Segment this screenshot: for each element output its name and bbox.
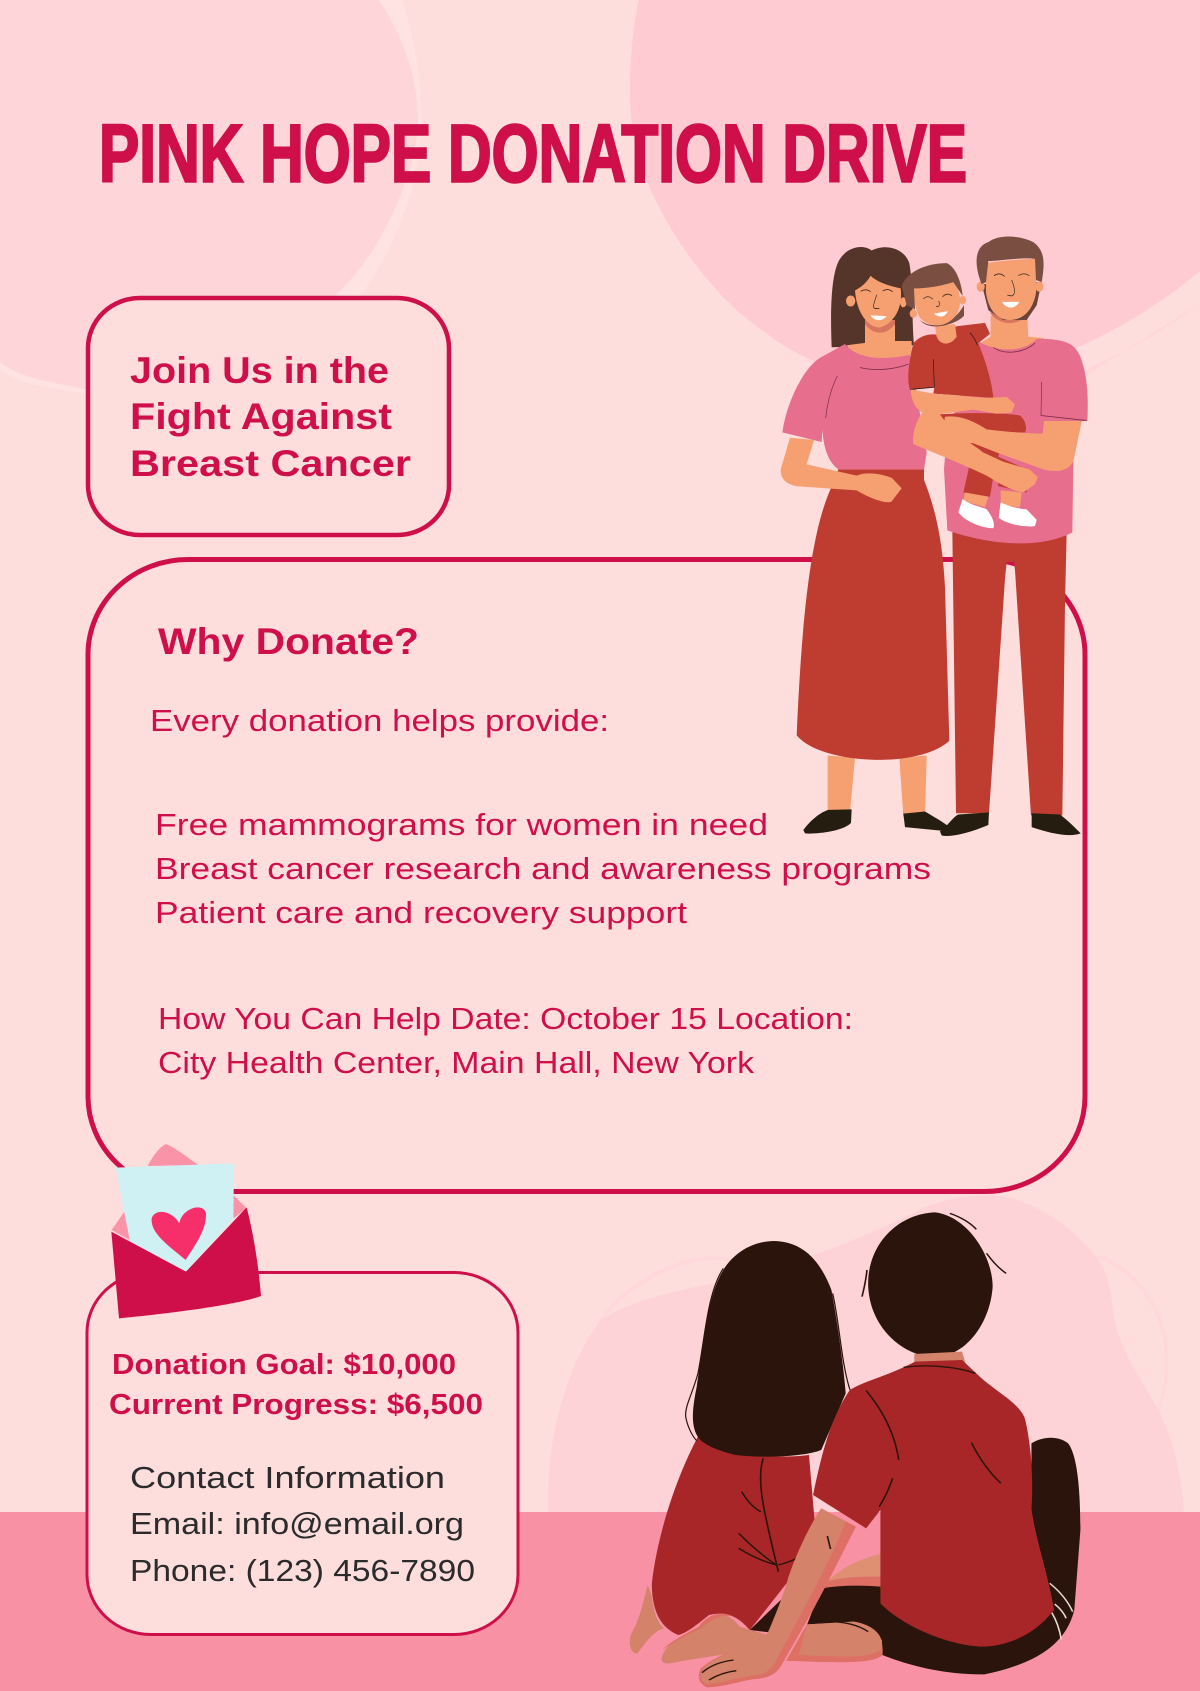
girl (630, 1241, 851, 1653)
man (940, 237, 1088, 836)
envelope body (111, 1207, 261, 1318)
panel: why donate (88, 560, 1085, 1192)
heart (152, 1207, 206, 1260)
donation progress: Current Progress: $6,500 (109, 1389, 483, 1421)
icon: envelope with heart (111, 1144, 261, 1318)
how you can help details: City Health Center, Main Hall, New York (158, 1045, 755, 1080)
contact information (130, 1460, 475, 1588)
list of benefits: Free mammograms for women in need (155, 807, 768, 842)
background blob: top left (0, 0, 421, 393)
child (902, 263, 1037, 528)
how you can help details (158, 1001, 853, 1080)
join us heading: Fight Against (130, 396, 392, 437)
panel: donation and contact (87, 1272, 518, 1634)
background blob: top right (630, 0, 1200, 400)
contact information: Contact Information (130, 1460, 445, 1495)
woman (781, 247, 949, 834)
why donate heading: Why Donate? (158, 621, 419, 662)
join us heading (130, 350, 411, 484)
join us heading: Join Us in the (130, 350, 389, 391)
intro line: Every donation helps provide: (150, 703, 609, 738)
letter (116, 1163, 234, 1272)
illustration: family (781, 237, 1088, 836)
floor band (0, 1512, 1200, 1691)
donation progress: Donation Goal: $10,000 (112, 1349, 456, 1381)
donation progress (109, 1349, 483, 1421)
contact information: Email: info@email.org (130, 1506, 464, 1541)
boy (750, 1212, 1080, 1674)
man's arms (913, 413, 1082, 493)
contact information: Phone: (123) 456-7890 (130, 1553, 475, 1588)
list of benefits: Patient care and recovery support (155, 895, 687, 930)
list of benefits (155, 807, 931, 930)
arm and feet (662, 1508, 856, 1687)
how you can help details: How You Can Help Date: October 15 Location: (158, 1001, 853, 1036)
envelope flap (112, 1144, 247, 1240)
panel: join us (88, 298, 449, 535)
list of benefits: Breast cancer research and awareness programs (155, 851, 931, 886)
illustration: couple sitting (630, 1212, 1080, 1687)
join us heading: Breast Cancer (130, 443, 411, 484)
background blob: bottom right (548, 1195, 1184, 1512)
